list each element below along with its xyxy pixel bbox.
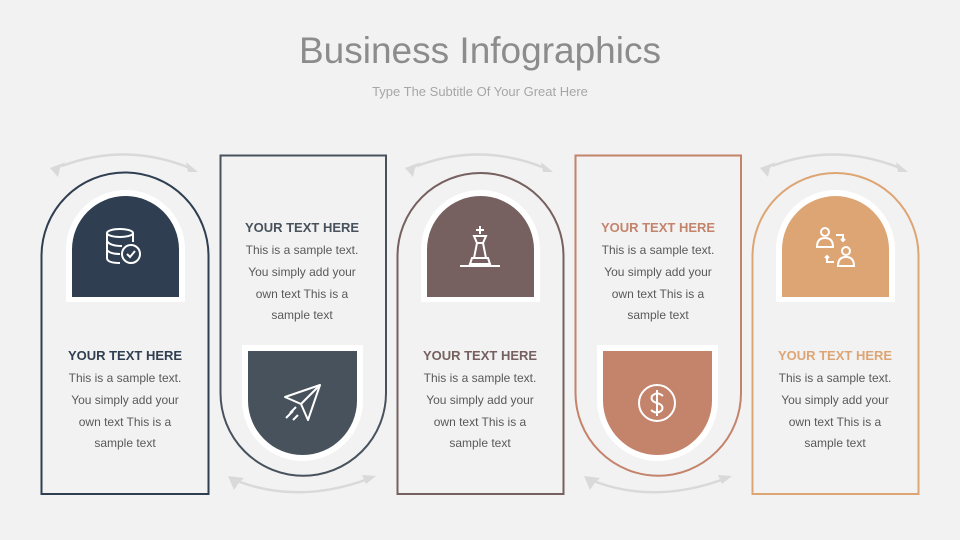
panel: column 1: This is a sample text. [69, 371, 181, 385]
icon: user exchange [817, 228, 854, 266]
panel: column 2: own text This is a [256, 287, 349, 301]
arrow: top 3 [405, 154, 553, 177]
panel: column 5 [752, 173, 918, 494]
panel: column 1: YOUR TEXT HERE [68, 348, 182, 363]
panel: column 5: This is a sample text. [779, 371, 891, 385]
panel: column 4: own text This is a [612, 287, 705, 301]
arrow: top 5 [760, 154, 908, 177]
panel: column 3: YOUR TEXT HERE [423, 348, 537, 363]
panel: column 4: YOUR TEXT HERE [601, 220, 715, 235]
arrow: top 1 [50, 154, 198, 177]
panel: column 3: This is a sample text. [424, 371, 536, 385]
panel: column 4: sample text [627, 308, 689, 322]
panel: column 4: This is a sample text. [602, 243, 714, 257]
panel: column 3: You simply add your [426, 393, 534, 407]
panel: column 1: You simply add your [71, 393, 179, 407]
arrow: bottom 2 [228, 475, 376, 492]
icon: dollar coin [639, 385, 675, 421]
panel: column 2: sample text [271, 308, 333, 322]
panel: column 3: sample text [449, 436, 511, 450]
title: Business Infographics [299, 30, 661, 71]
panel: column 2: You simply add your [248, 265, 356, 279]
panel: column 1: sample text [94, 436, 156, 450]
panel: column 1 [42, 173, 208, 494]
panel: column 1: own text This is a [79, 415, 172, 429]
arrow: bottom 4 [584, 475, 732, 492]
panel: column 5: You simply add your [781, 393, 889, 407]
panel: column 5: YOUR TEXT HERE [778, 348, 892, 363]
icon: paper plane [285, 385, 320, 420]
subtitle: Type The Subtitle Of Your Great Here [372, 84, 588, 99]
panel: column 5: own text This is a [789, 415, 882, 429]
panel: column 4 [576, 156, 741, 476]
panel: column 3: own text This is a [434, 415, 527, 429]
icon: database check [107, 229, 140, 263]
panel: column 2 [220, 156, 386, 476]
panel: column 3 [398, 173, 564, 494]
icon: chess king [460, 226, 500, 266]
panel: column 4: You simply add your [604, 265, 712, 279]
panel: column 2: YOUR TEXT HERE [245, 220, 359, 235]
panel: column 2: This is a sample text. [246, 243, 358, 257]
panel: column 5: sample text [804, 436, 866, 450]
